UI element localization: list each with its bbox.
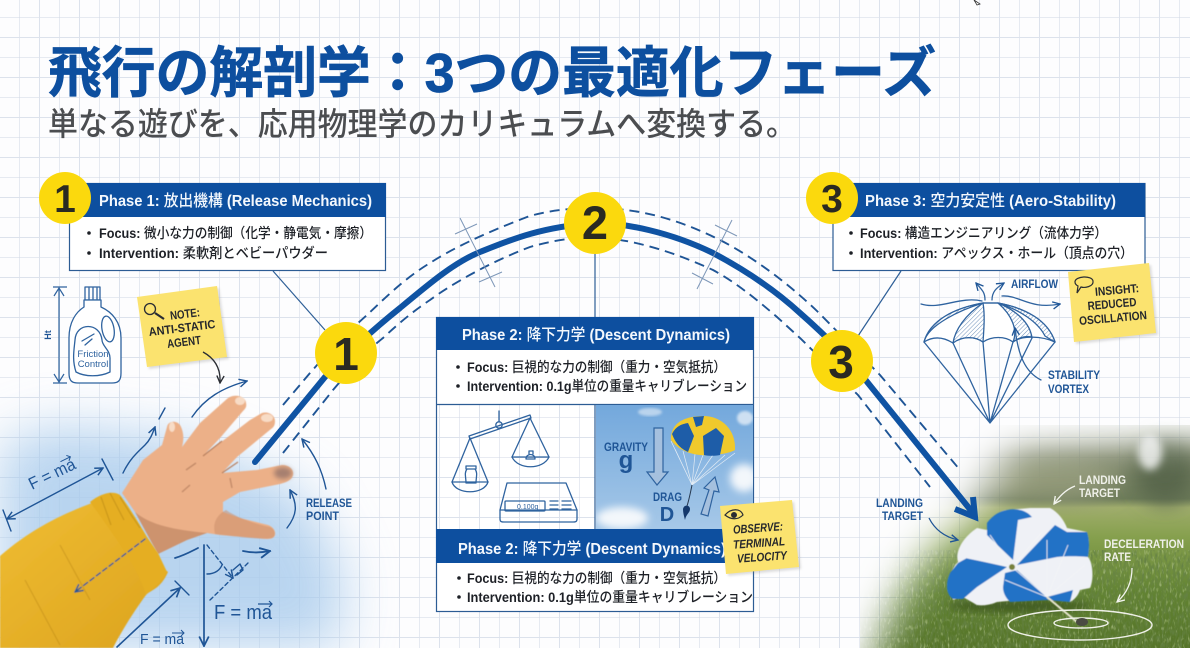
arrow: landing target right (1054, 486, 1075, 504)
gravity label: GRAVITY (604, 440, 648, 454)
phase 2 top header: Phase 2: 降下力学 (Descent Dynamics) (462, 326, 730, 344)
icon: fabric softener bottle: Control (78, 359, 108, 370)
formula: F=ma left: F = ma (25, 454, 79, 494)
formula: F=ma right: F = ma (214, 602, 273, 624)
phase 1 header (69, 183, 386, 217)
icon: fabric softener bottle (43, 287, 121, 383)
phase 2 top bullet list (456, 359, 747, 394)
icon: speech bubble (1075, 277, 1093, 293)
badge: arc marker 3 (811, 330, 873, 392)
image panel: parachute gravity and drag (596, 405, 758, 529)
icon: magnifier (144, 304, 164, 319)
label: landing target left: LANDING (876, 496, 923, 510)
phase 1 bullet list: Intervention: 柔軟剤とベビーパウダー (99, 245, 328, 261)
label: landing target right (1079, 473, 1126, 500)
badge: phase 1: 1 (54, 178, 76, 221)
dashed force arrow on sleeve (75, 539, 145, 592)
phase 2 bottom header (436, 529, 754, 563)
label: landing target right: LANDING (1079, 473, 1126, 487)
badge: arc marker 1 (315, 322, 377, 384)
gravity label: g (619, 447, 633, 474)
gravity label (604, 440, 648, 474)
phase 3 header: Phase 3: 空力安定性 (Aero-Stability) (865, 192, 1116, 210)
label: landing target right: TARGET (1079, 486, 1121, 500)
label: stability vortex: VORTEX (1048, 382, 1089, 396)
note text (148, 305, 216, 351)
jacket sleeve (0, 493, 168, 648)
connector lines (273, 250, 901, 336)
photo: lawn landing field (860, 425, 1194, 648)
photo: landed blue and white parachute (947, 508, 1152, 640)
label: airflow: AIRFLOW (1011, 277, 1059, 291)
label: release point: RELEASE (306, 496, 352, 510)
phase 2 top bullet list: Intervention: 0.1g単位の重量キャリブレーション (467, 378, 747, 394)
drag label: DRAG (653, 490, 682, 504)
label: deceleration rate (1104, 537, 1184, 564)
label: landing target left: TARGET (882, 509, 924, 523)
badge: arc marker 3: 3 (828, 336, 854, 388)
sticky note: anti-static agent (137, 286, 229, 369)
badge: arc marker 2 (564, 192, 626, 254)
label: stability vortex (1048, 368, 1100, 396)
landing target rings (1008, 610, 1152, 640)
image panel: balance and digital scale (437, 404, 754, 529)
drag label: D (660, 504, 674, 526)
hand (122, 396, 293, 554)
label: landing target left (876, 496, 924, 523)
note text: VELOCITY (737, 548, 788, 566)
phase 2 bottom bullet list (457, 570, 753, 605)
formula: F=ma bottom: F = ma (140, 631, 185, 648)
photo: hand and yellow jacket sleeve (0, 396, 293, 648)
arrow: deceleration rate (1117, 568, 1132, 602)
label: release point: POINT (306, 509, 340, 523)
flight trajectory arc (255, 208, 975, 517)
background: blue haze behind hand (0, 425, 345, 648)
subtitle: 単なる遊びを、応用物理学のカリキュラムへ変換する。 (48, 106, 796, 142)
note text: TERMINAL (733, 534, 785, 552)
note text: NOTE: (169, 305, 201, 323)
phase 3 header (833, 183, 1145, 217)
icon: fabric softener bottle: Friction (77, 349, 109, 360)
title: 飛行の解剖学：3つの最適化フェーズ (48, 42, 936, 104)
hand-drawn force annotations (3, 381, 326, 647)
right edge strip (1190, 0, 1194, 648)
phase 1 bullet list (87, 225, 372, 261)
phase 3 bullet list (849, 225, 1133, 261)
phase 2 bottom bullet list: Focus: 巨視的な力の制御（重力・空気抵抗） (467, 570, 726, 586)
arrow: note to hand (203, 352, 220, 383)
note text: REDUCED (1087, 295, 1137, 313)
image panel: balance and digital scale: 0.100g (517, 504, 539, 511)
note text: OBSERVE: (733, 519, 783, 537)
label: stability vortex: STABILITY (1048, 368, 1100, 382)
phase 2 bottom header: Phase 2: 降下力学 (Descent Dynamics) (458, 540, 726, 558)
phase 1 bullet list: Focus: 微小な力の制御（化学・静電気・摩擦） (99, 225, 372, 241)
label: deceleration rate: RATE (1104, 550, 1131, 564)
icon: gravity arrow (647, 428, 668, 485)
note text (733, 519, 788, 566)
phase 2 top header (436, 317, 754, 350)
arrow: landing target left (929, 518, 958, 540)
icon: mouse cursor (974, 0, 980, 5)
panel: phase 3 aero-stability (833, 183, 1145, 270)
panel: phase 1 release mechanics (69, 183, 386, 270)
label: release point (306, 496, 352, 523)
note text: OSCILLATION (1079, 308, 1147, 328)
phase 1 header: Phase 1: 放出機構 (Release Mechanics) (99, 192, 372, 210)
badge: phase 1 (39, 172, 91, 224)
badge: arc marker 1: 1 (333, 328, 359, 380)
drag label (653, 490, 682, 526)
phase 2 top bullet list: Focus: 巨視的な力の制御（重力・空気抵抗） (467, 359, 726, 375)
note text: ANTI-STATIC (148, 317, 216, 339)
badge: phase 3 (806, 172, 858, 224)
note text (1079, 281, 1147, 328)
diagram: canopy with apex hole (921, 277, 1100, 423)
phase 2 bottom bullet list: Intervention: 0.1g単位の重量キャリブレーション (467, 589, 753, 605)
phase 3 bullet list: Intervention: アペックス・ホール（頂点の穴） (860, 245, 1133, 261)
icon: drag arrow (701, 477, 719, 516)
panel: phase 2 descent dynamics (436, 317, 758, 612)
icon: eye (725, 510, 743, 519)
landing stone (1076, 618, 1088, 626)
icon: parachute in sky (671, 416, 735, 520)
note text: AGENT (166, 333, 202, 351)
badge: phase 3: 3 (821, 178, 843, 221)
phase 3 bullet list: Focus: 構造エンジニアリング（流体力学） (860, 225, 1107, 241)
sticky note: observe terminal velocity (720, 500, 801, 576)
sticky note: insight reduced oscillation (1068, 263, 1158, 344)
icon: fabric softener bottle: Ht (43, 330, 53, 340)
note text: INSIGHT: (1094, 281, 1140, 299)
badge: arc marker 2: 2 (582, 196, 608, 249)
